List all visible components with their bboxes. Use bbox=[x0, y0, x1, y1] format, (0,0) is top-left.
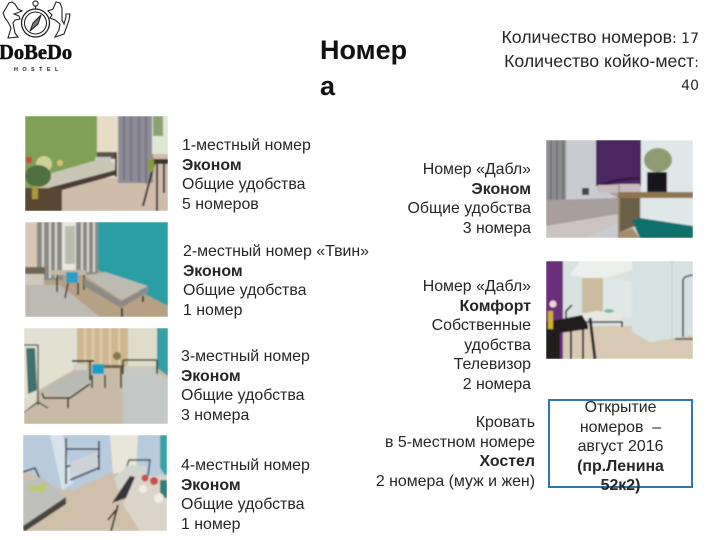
text: double economy bbox=[408, 161, 531, 236]
summary counts bbox=[501, 27, 699, 94]
callout text: август 2016 bbox=[578, 438, 663, 455]
text: single room: Эконом bbox=[182, 156, 242, 174]
text: double comfort bbox=[423, 278, 531, 392]
text: twin room: 1 номер bbox=[183, 302, 242, 318]
text: twin room: Эконом bbox=[183, 262, 243, 280]
text: double comfort: 2 номера bbox=[463, 376, 531, 392]
text: double economy: Эконом bbox=[471, 180, 531, 198]
title: Номера bbox=[320, 35, 407, 101]
summary counts: 40 bbox=[681, 78, 699, 94]
text: four-bed room: 1 номер bbox=[181, 516, 240, 532]
text: twin room: Общие удобства bbox=[183, 282, 306, 299]
text: double economy: 3 номера bbox=[463, 220, 531, 236]
text: single room: 5 номеров bbox=[182, 196, 259, 212]
summary counts: Количество койко-мест: bbox=[504, 51, 699, 71]
text: single room: Общие удобства bbox=[182, 176, 305, 193]
text: double comfort: Собственные bbox=[432, 317, 531, 334]
icon: bears with compass bbox=[2, 0, 71, 39]
logo: DoBeDo hostel bbox=[0, 0, 72, 73]
summary counts: Количество номеров: 17 bbox=[501, 27, 699, 47]
text: hostel bed: Хостел bbox=[480, 453, 535, 470]
text: four-bed room: 4-местный номер bbox=[181, 457, 310, 474]
text: double economy: Общие удобства bbox=[408, 200, 531, 217]
photo: four-bed room bbox=[23, 435, 167, 532]
text: hostel bed: в 5-местном номере bbox=[385, 434, 535, 450]
photo: twin room, teal wall bbox=[25, 222, 168, 317]
text: double comfort: удобства bbox=[464, 336, 531, 354]
text: four-bed room: Общие удобства bbox=[181, 496, 304, 513]
text: twin room: 2-местный номер «Твин» bbox=[183, 243, 369, 260]
callout text: (пр.Ленина bbox=[577, 458, 664, 474]
text: double comfort: Комфорт bbox=[460, 298, 531, 314]
text: hostel bed bbox=[376, 414, 535, 490]
text: single room: 1-местный номер bbox=[182, 137, 311, 154]
text: twin room bbox=[183, 243, 369, 318]
text: single room bbox=[182, 137, 311, 212]
text: four-bed room: Эконом bbox=[181, 476, 241, 494]
photo: triple room bbox=[24, 328, 168, 424]
logo wordmark: DoBeDo bbox=[0, 42, 72, 64]
text: double comfort: Телевизор bbox=[454, 356, 531, 373]
text: triple room: Общие удобства bbox=[181, 387, 304, 404]
text: triple room bbox=[181, 348, 310, 424]
callout text: номеров – bbox=[580, 418, 661, 436]
callout text bbox=[577, 399, 664, 494]
callout text: 52к2) bbox=[601, 477, 640, 494]
text: hostel bed: 2 номера (муж и жен) bbox=[376, 472, 535, 490]
photo: double room comfort, purple wall bbox=[546, 261, 693, 359]
callout: opening date bbox=[548, 399, 693, 488]
photo: single room, green wall bbox=[25, 116, 168, 211]
callout text: Открытие bbox=[585, 399, 656, 416]
text: double comfort: Номер «Дабл» bbox=[423, 278, 531, 295]
text: triple room: 3-местный номер bbox=[181, 348, 310, 365]
logo subtitle: HOSTEL bbox=[14, 67, 63, 73]
text: triple room: 3 номера bbox=[181, 406, 249, 424]
text: double economy: Номер «Дабл» bbox=[423, 161, 531, 178]
text: triple room: Эконом bbox=[181, 368, 241, 384]
photo: double room economy, purple wall bbox=[546, 140, 693, 238]
text: hostel bed: Кровать bbox=[476, 414, 535, 431]
text: four-bed room bbox=[181, 457, 310, 532]
